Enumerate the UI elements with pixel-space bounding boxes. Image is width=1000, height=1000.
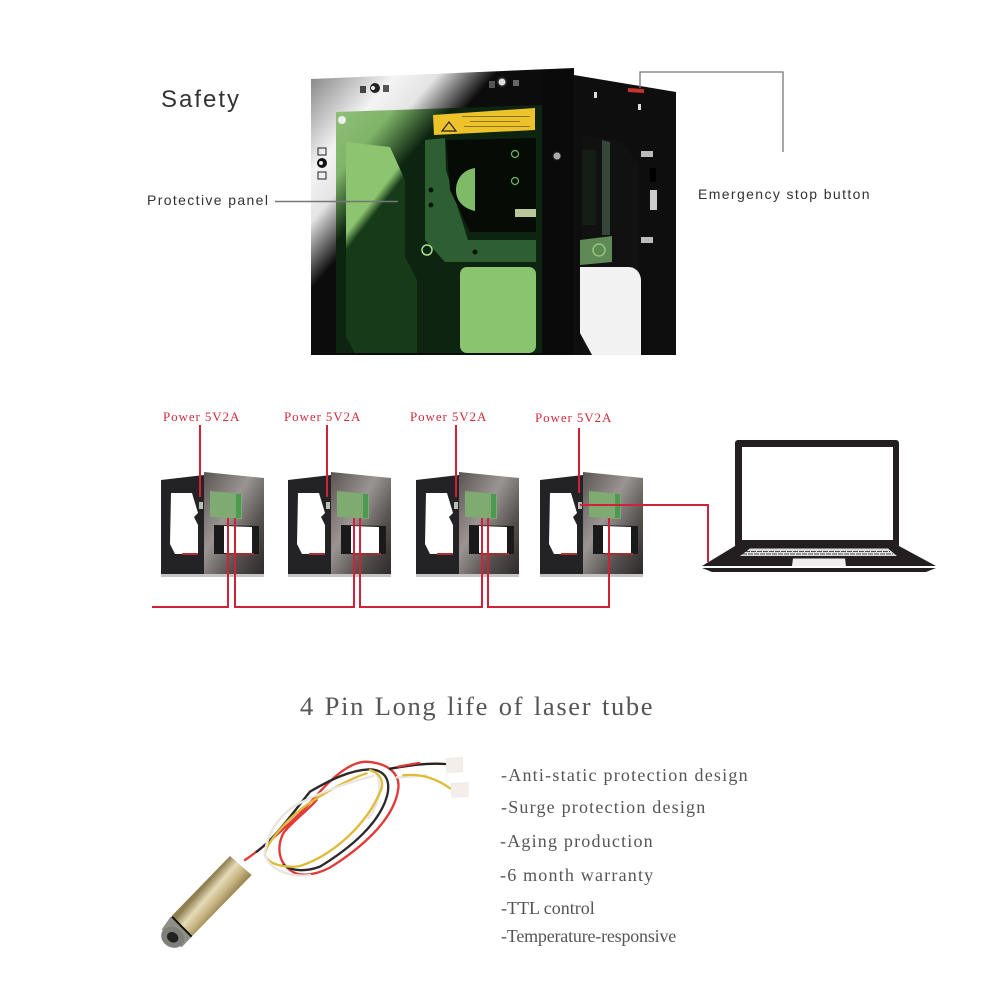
red wiring — [152, 425, 708, 607]
laser tube module illustration — [157, 757, 468, 952]
acrylic window — [336, 105, 542, 353]
front panel — [311, 68, 574, 355]
feature list: -Surge protection design — [501, 797, 706, 817]
power labels: Power 5V2A — [284, 409, 361, 424]
callout: protective panel: Protective panel — [147, 192, 269, 208]
connectors — [446, 757, 463, 773]
feature list: -6 month warranty — [500, 865, 654, 885]
feature list: -Anti-static protection design — [501, 765, 749, 785]
power labels — [163, 409, 612, 425]
callout: emergency stop button — [640, 72, 871, 202]
product photo: engraver with protective panel — [311, 68, 676, 355]
green panel areas — [346, 142, 417, 353]
lens cap — [162, 917, 192, 947]
front edge of body — [542, 70, 574, 355]
warning label — [433, 108, 535, 135]
side of machine — [574, 75, 676, 355]
callout: emergency stop button: Emergency stop button — [698, 186, 871, 202]
heading: 4 Pin Long life of laser tube: 4 Pin Long life of laser tube — [300, 691, 654, 721]
laser carriage — [422, 138, 536, 262]
machine 2 — [288, 472, 391, 577]
front mounting holes — [317, 78, 519, 179]
machine 4 — [540, 472, 643, 577]
laptop — [702, 440, 936, 572]
feature list: -TTL control — [501, 898, 595, 918]
power labels: Power 5V2A — [163, 409, 240, 424]
wires — [245, 762, 450, 876]
machine 3 — [416, 472, 519, 577]
heading: Safety: Safety — [161, 86, 241, 113]
connection diagram: machines and laptop — [152, 409, 936, 607]
power labels: Power 5V2A — [535, 410, 612, 425]
feature list: -Temperature-responsive — [501, 926, 676, 946]
brass barrel — [172, 856, 252, 937]
power labels: Power 5V2A — [410, 409, 487, 424]
feature list: -Aging production — [500, 831, 654, 851]
feature list — [500, 765, 749, 946]
machine 1 — [161, 472, 264, 577]
